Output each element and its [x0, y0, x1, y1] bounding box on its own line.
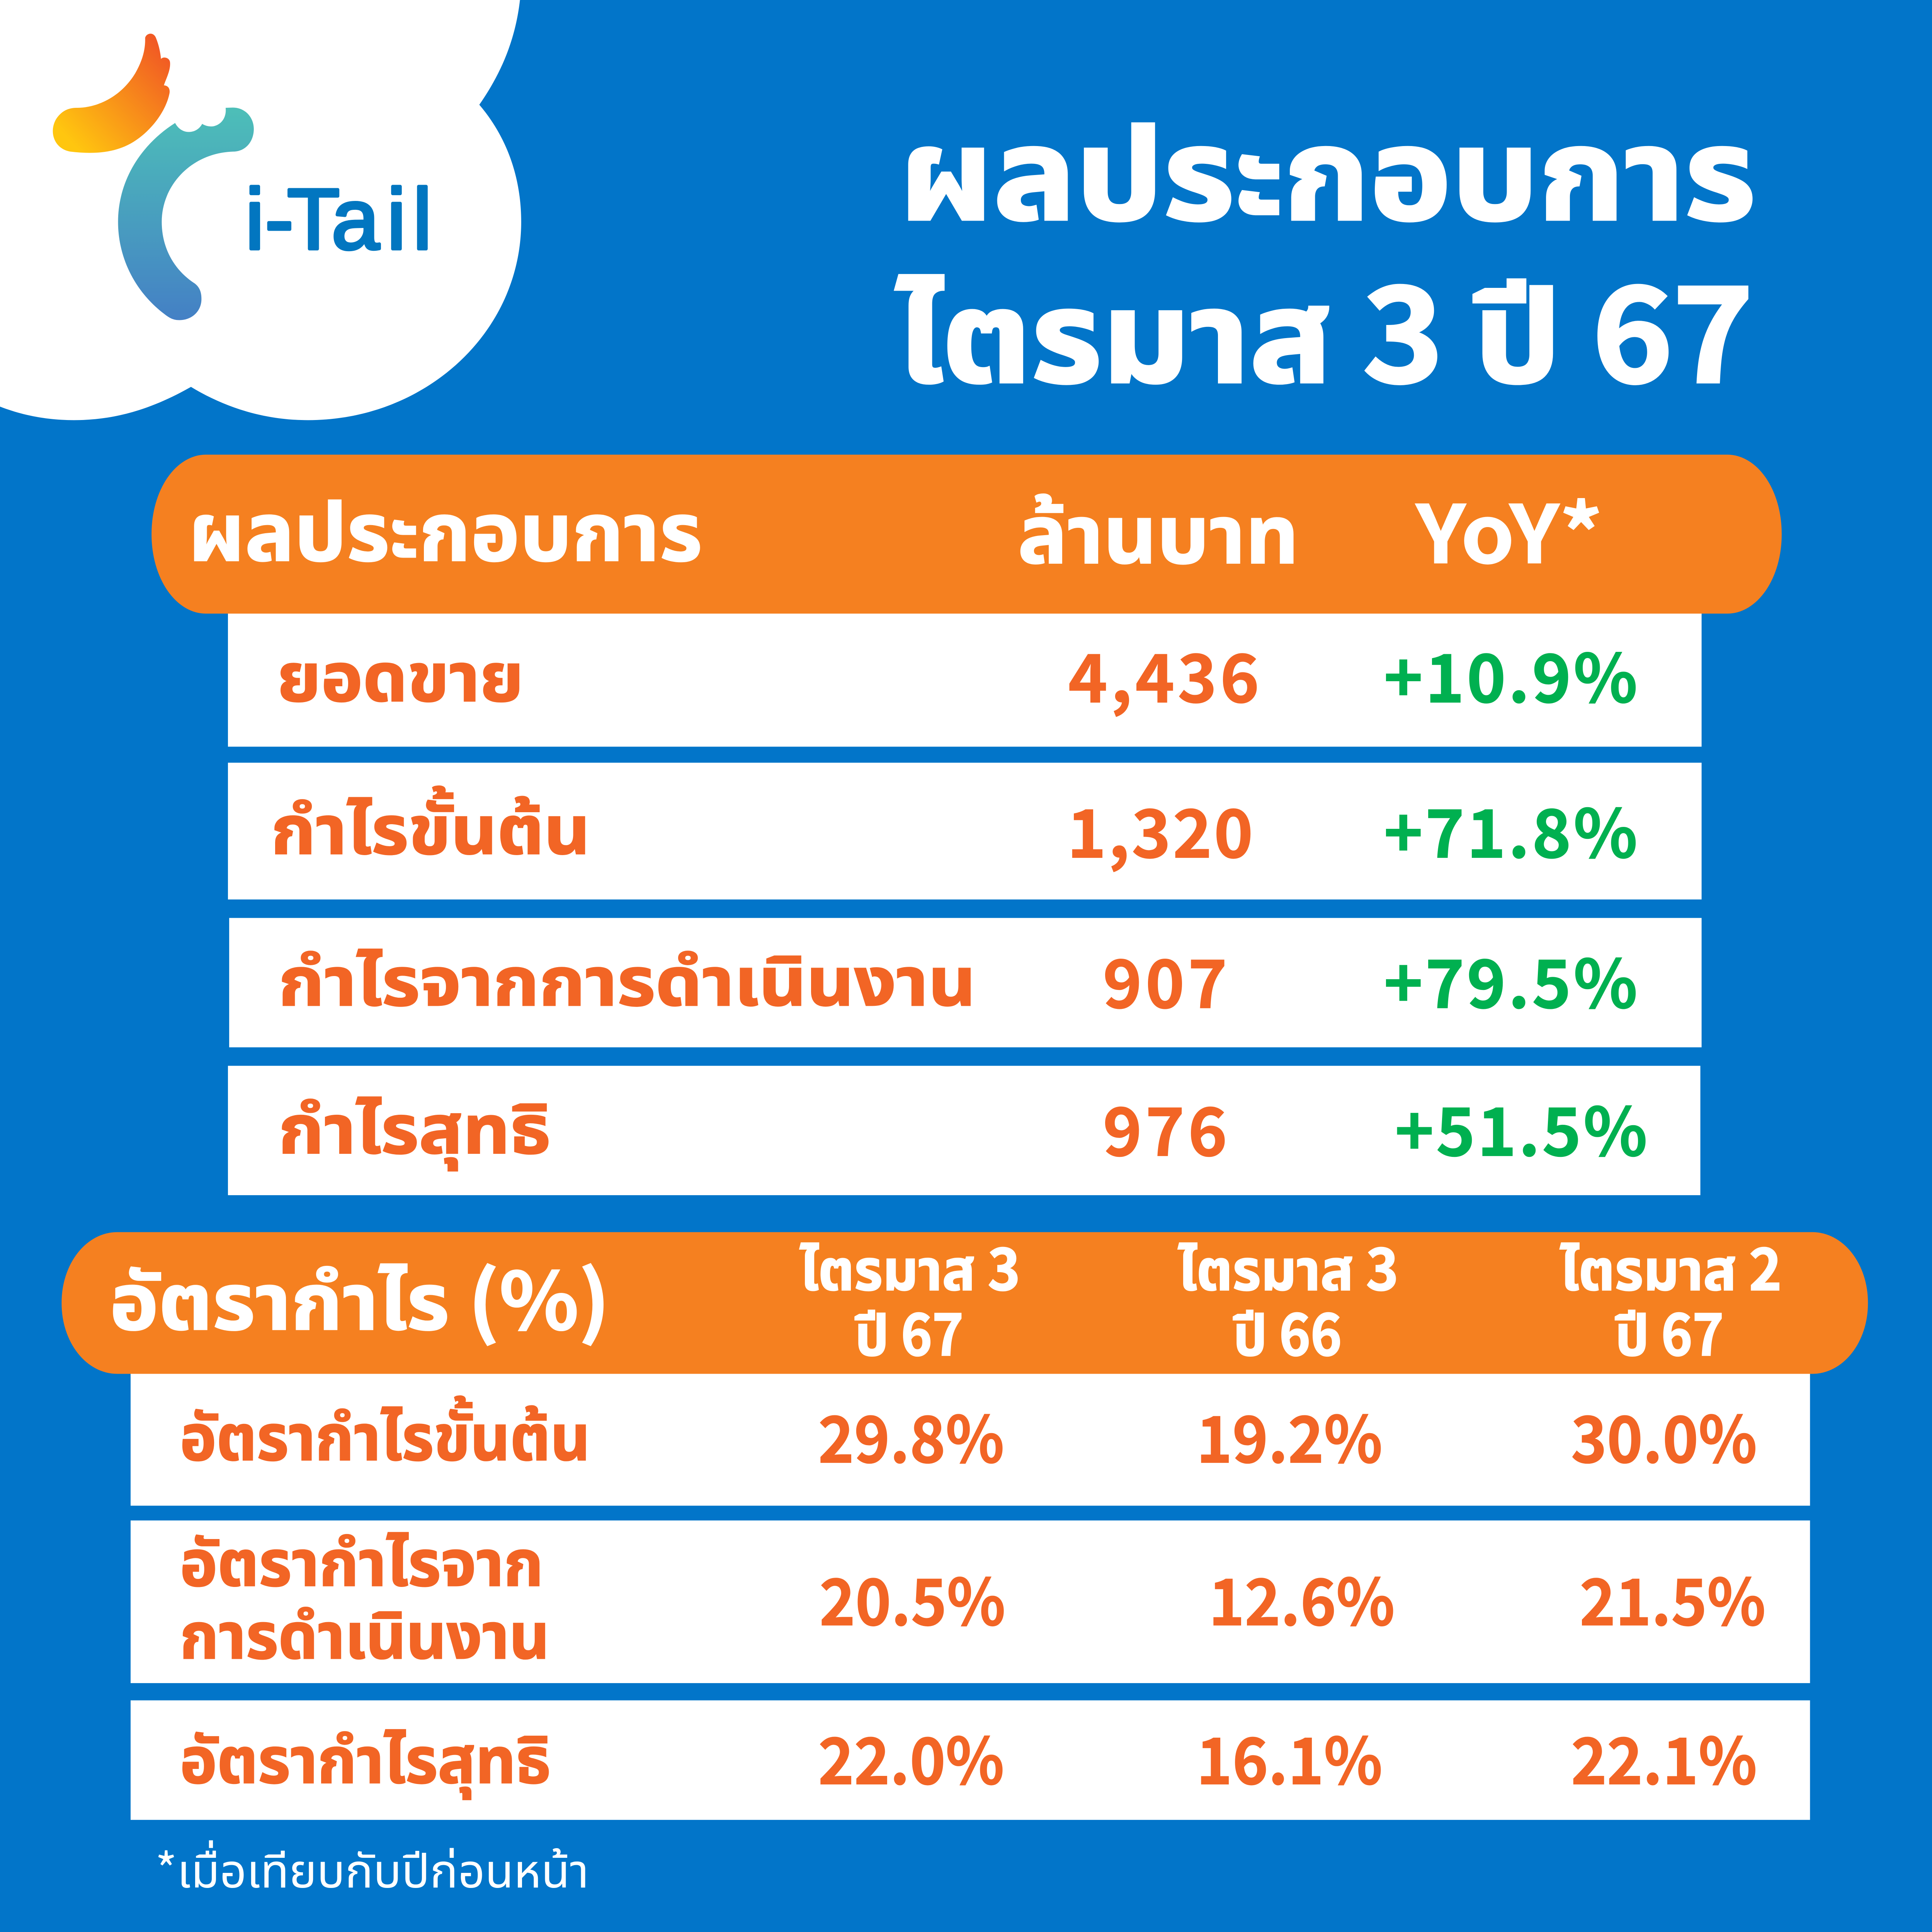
row: gross margin: อัตรากำไรขั้นต้น — [180, 1386, 590, 1479]
row: sales — [228, 614, 1702, 747]
table header: ล้านบาท — [1018, 469, 1299, 587]
margin table header: ไตรมาส 2 — [1560, 1225, 1782, 1307]
row: operating margin — [131, 1512, 1810, 1683]
panel: profit margin table — [61, 1225, 1868, 1820]
footnote: *เมื่อเทียบกับปีก่อนหน้า — [155, 1833, 589, 1901]
row: net margin: 16.1% — [1196, 1710, 1383, 1803]
row: operating profit: +79.5% — [1384, 930, 1638, 1027]
row: net margin: 22.0% — [818, 1710, 1004, 1803]
row: operating profit: กำไรจากการดำเนินงาน — [279, 927, 976, 1025]
logo wordmark: i-Tail — [245, 171, 432, 267]
table header — [151, 455, 1782, 614]
row: sales: +10.9% — [1384, 625, 1638, 722]
row: gross profit: กำไรขั้นต้น — [271, 776, 590, 874]
row: operating margin: 21.5% — [1580, 1551, 1766, 1644]
icon: i-Tail logo mark — [53, 34, 254, 320]
row: gross margin — [131, 1374, 1810, 1506]
row: net margin — [131, 1701, 1810, 1820]
row: operating margin: 20.5% — [820, 1551, 1005, 1644]
row: operating margin: การดำเนินงาน — [180, 1584, 549, 1677]
row: gross profit — [228, 763, 1702, 900]
margin table header: ไตรมาส 3 — [1178, 1225, 1398, 1307]
row: net margin: อัตรากำไรสุทธิ — [180, 1709, 551, 1801]
row: sales: ยอดขาย — [277, 622, 524, 721]
row: operating margin: 12.6% — [1209, 1551, 1395, 1644]
margin table header: ปี 67 — [855, 1290, 964, 1372]
row: net profit — [228, 1066, 1701, 1195]
table header: ผลประกอบการ — [189, 466, 702, 584]
margin table header — [61, 1225, 1868, 1374]
title: ผลประกอบการ — [900, 71, 1756, 257]
margin table header: ไตรมาส 3 — [800, 1225, 1020, 1307]
row: net profit: กำไรสุทธิ — [279, 1075, 551, 1173]
row: gross profit: 1,320 — [1067, 780, 1253, 877]
row: sales: 4,436 — [1068, 625, 1259, 722]
logo cloud panel — [0, 0, 521, 420]
row: gross margin: 19.2% — [1196, 1388, 1383, 1481]
row: operating margin: อัตรากำไรจาก — [180, 1512, 543, 1604]
row: net profit: +51.5% — [1395, 1078, 1647, 1175]
margin table header: ปี 67 — [1615, 1290, 1724, 1372]
row: net margin: 22.1% — [1571, 1710, 1757, 1803]
row: gross margin: 30.0% — [1571, 1388, 1757, 1481]
row: operating profit: 907 — [1103, 930, 1227, 1027]
row: gross margin: 29.8% — [818, 1388, 1004, 1481]
row: gross profit: +71.8% — [1384, 780, 1638, 877]
row: net profit: 976 — [1103, 1078, 1227, 1175]
margin table header: อัตรากำไร (%) — [110, 1238, 610, 1352]
title — [896, 71, 1756, 419]
row: operating profit — [229, 918, 1702, 1047]
table header: YoY* — [1415, 470, 1603, 586]
margin table header: ปี 66 — [1233, 1290, 1342, 1372]
title: ไตรมาส 3 ปี 67 — [896, 233, 1753, 419]
panel: quarterly results table — [151, 455, 1782, 1195]
